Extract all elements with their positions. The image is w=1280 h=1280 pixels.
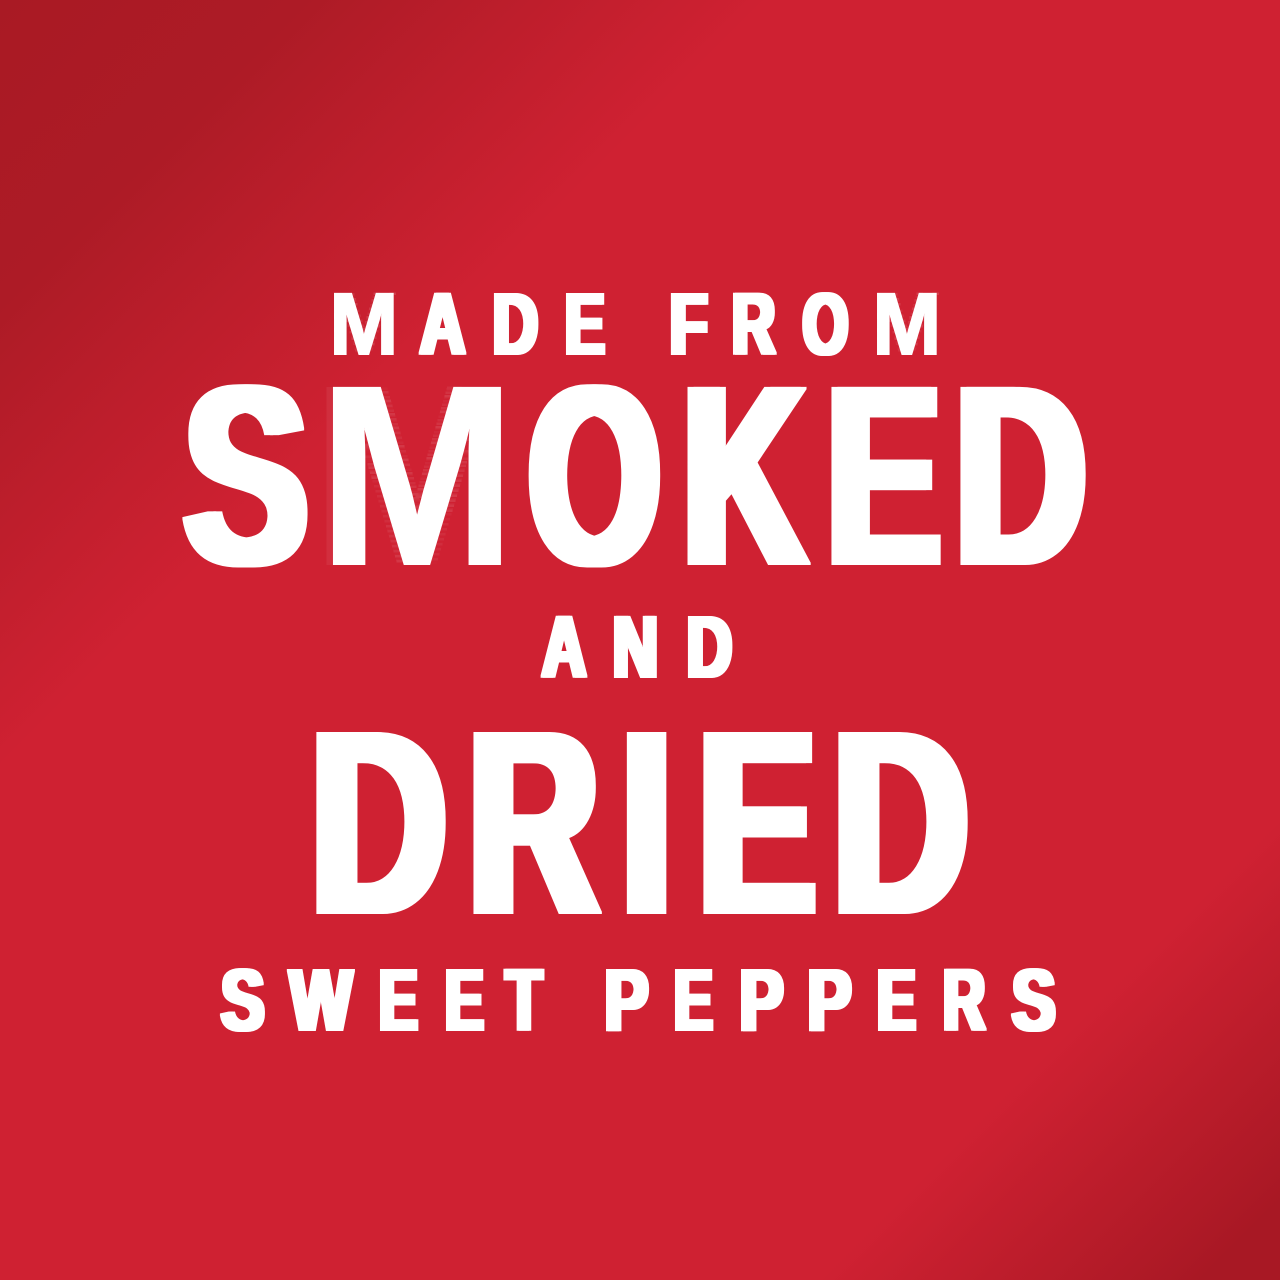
headline: dried: I	[622, 677, 671, 969]
headline: sweet peppers: E	[445, 952, 484, 1049]
headline: made from: E	[565, 276, 605, 373]
headline: made from: R	[732, 276, 775, 373]
headline: sweet peppers: S	[221, 952, 264, 1049]
headline: smoked: M	[318, 333, 516, 619]
headline: and: N	[613, 599, 658, 696]
headline: made from: F	[670, 276, 708, 373]
headline: sweet peppers: S	[1012, 952, 1056, 1049]
headline: smoked: D	[955, 333, 1086, 619]
headline: made from: O	[803, 276, 848, 373]
headline: sweet peppers: E	[379, 952, 418, 1049]
headline: sweet peppers: E	[877, 952, 916, 1049]
headline: sweet peppers: P	[740, 952, 783, 1049]
headline: made from: A	[420, 276, 465, 373]
headline: and: A	[542, 599, 586, 696]
headline: sweet peppers: R	[943, 952, 985, 1049]
headline: sweet peppers: P	[808, 952, 851, 1049]
headline: and: D	[687, 599, 732, 696]
headline: sweet peppers: P	[605, 952, 648, 1049]
headline: smoked: E	[827, 333, 940, 619]
headline: smoked: S	[184, 333, 308, 619]
headline: sweet peppers: T	[506, 952, 542, 1049]
headline: made from: D	[493, 276, 538, 373]
headline: dried: D	[311, 677, 447, 969]
headline: dried: E	[699, 677, 816, 969]
headline: sweet peppers: W	[290, 952, 353, 1049]
headline: smoked: O	[529, 333, 660, 619]
headline: dried: R	[468, 677, 599, 969]
headline: smoked: K	[683, 333, 805, 619]
headline: dried: D	[833, 677, 969, 969]
headline: made from: M	[872, 276, 941, 373]
headline: sweet peppers: E	[674, 952, 713, 1049]
headline: made from: M	[330, 276, 398, 373]
